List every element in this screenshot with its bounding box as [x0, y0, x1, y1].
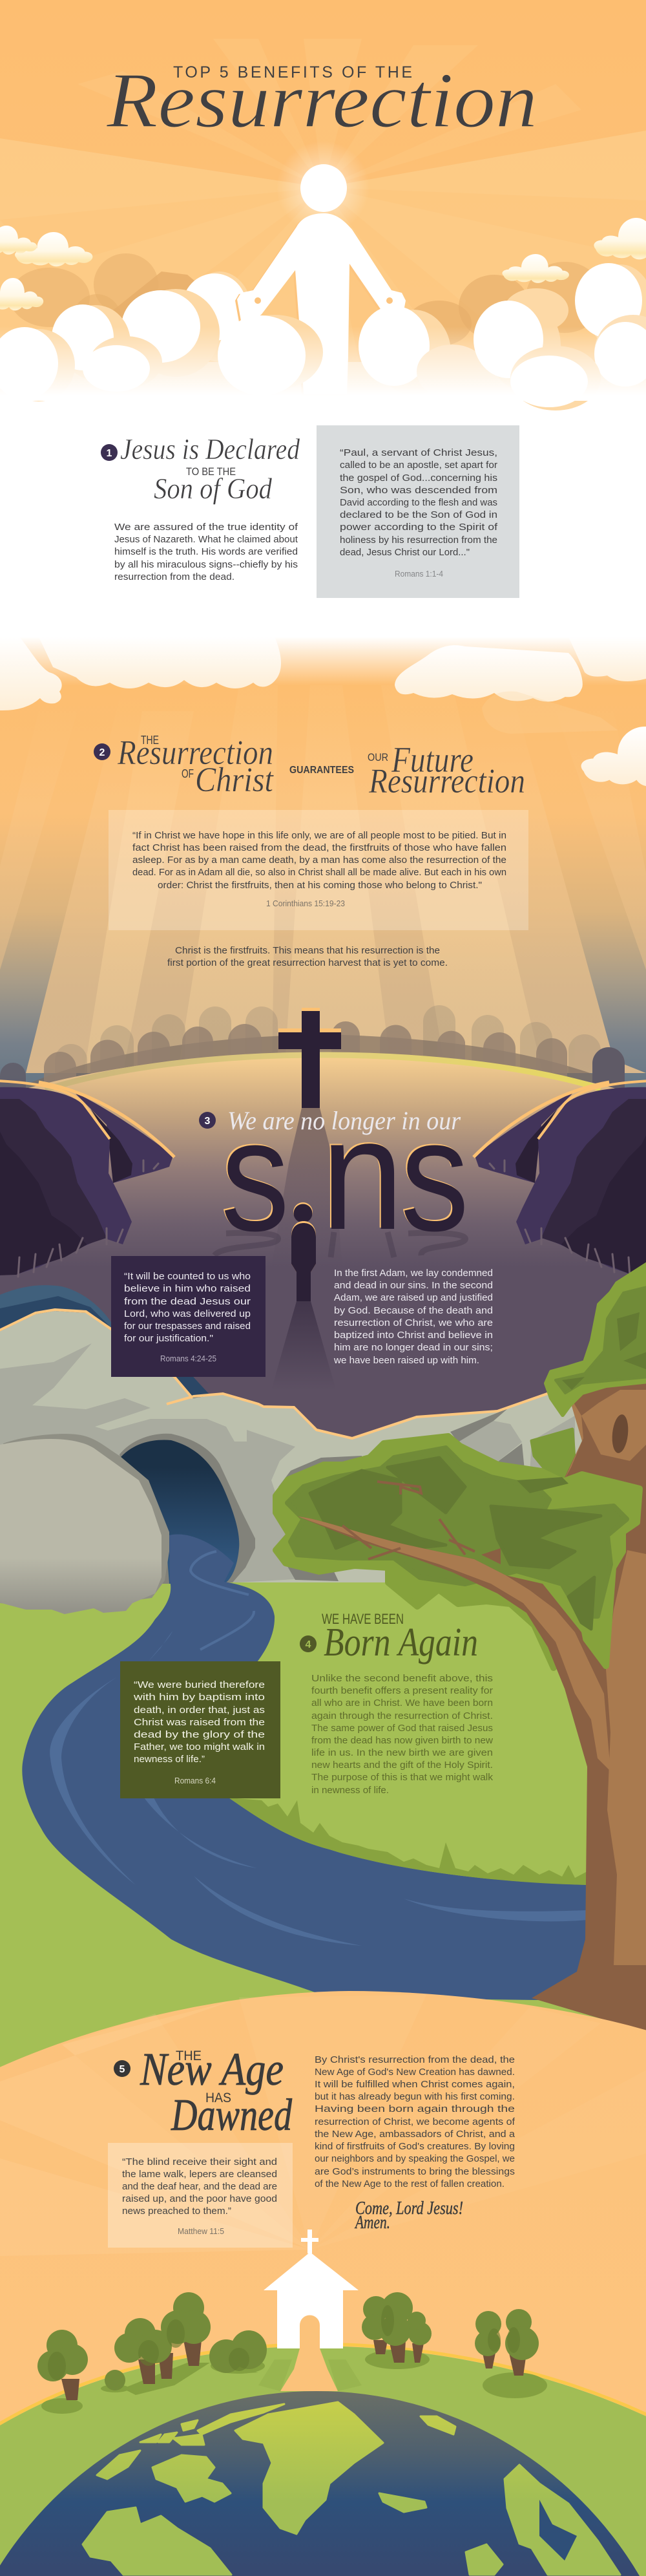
- trunk: [532, 1383, 646, 2033]
- tree shadows: [41, 2350, 547, 2414]
- section 2 scene: sky and light beams: [0, 637, 646, 1089]
- quote card: Romans 1:1-4: dead, Jesus Christ our Lord...": [340, 547, 470, 558]
- text block: The same power of God that raised Jesus: [311, 1723, 493, 1734]
- text block: resurrection from the dead.: [114, 571, 234, 582]
- badge 5: [114, 2060, 130, 2077]
- text block: life in us. In the new birth we are given: [311, 1747, 493, 1758]
- text block: Having been born again through the: [315, 2103, 515, 2114]
- quote card: Romans 1:1-4: declared to be the Son of God in: [340, 509, 497, 520]
- heading: The Resurrection of Christ guarantees our Future Resurrection: OF: [182, 767, 194, 780]
- text block: the New Age, ambassadors of Christ, and a: [315, 2129, 516, 2140]
- rock body: [0, 1311, 585, 1582]
- quote card: 1 Corinthians 15:19-23: order: Christ the firstfruits, then at his coming those who belong to Christ.": [158, 880, 482, 891]
- quote card: Romans 6:4: dead by the glory of the: [134, 1729, 265, 1740]
- heading: The Resurrection of Christ guarantees our Future Resurrection: Resurrection: [117, 733, 273, 772]
- heading: The Resurrection of Christ guarantees our Future Resurrection: [117, 733, 525, 800]
- big word: sins: s: [399, 1085, 468, 1262]
- quote card: Romans 1:1-4: “Paul, a servant of Christ Jesus,: [340, 447, 497, 458]
- quote card: Romans 6:4: Romans 6:4: [174, 1776, 216, 1785]
- trees: [37, 2292, 547, 2414]
- quote card: Romans 6:4: “We were buried therefore: [134, 1679, 265, 1690]
- benefit 3 text block: baptized into Christ and believe in: [334, 1330, 493, 1341]
- text block: [315, 2054, 516, 2189]
- benefit 3 text block: him are no longer dead in our sins;: [334, 1342, 493, 1353]
- quote card: Matthew 11:5: raised up, and the poor have good: [122, 2193, 277, 2204]
- quote card: Romans 1:1-4: Son, who was descended from: [340, 485, 497, 496]
- benefit 2 panel: [94, 733, 528, 968]
- benefit 3 panel: [199, 1084, 469, 1390]
- heading: The Resurrection of Christ guarantees our Future Resurrection: OUR: [368, 751, 388, 763]
- quote card: Romans 1:1-4: David according to the flesh and was: [340, 497, 497, 508]
- heading: The New Age has Dawned: New Age: [140, 2043, 284, 2095]
- closing prayer: Amen.: [354, 2213, 390, 2233]
- heading: The New Age has Dawned: THE: [176, 2049, 202, 2063]
- text block: himself is the truth. His words are verified: [114, 546, 298, 557]
- quote card: Matthew 11:5: news preached to them.”: [122, 2206, 231, 2217]
- text block: of the New Age to the rest of fallen creation.: [315, 2178, 505, 2189]
- benefit 3 quote card: Romans 4:24-25: for our justification.": [124, 1333, 213, 1344]
- big word: sins: [220, 1084, 469, 1264]
- heading: The New Age has Dawned: HAS: [205, 2091, 231, 2105]
- benefit 3 text block: Adam, we are raised up and justified: [334, 1292, 493, 1303]
- benefit 3 quote card: Romans 4:24-25: believe in him who raised: [124, 1283, 251, 1294]
- closing prayer: [354, 2198, 463, 2233]
- back clouds: [10, 253, 603, 352]
- quote card: 1 Corinthians 15:19-23: [109, 810, 528, 930]
- benefit 3 quote card: Romans 4:24-25: Romans 4:24-25: [160, 1354, 216, 1363]
- heading: We have been Born Again: [322, 1611, 478, 1665]
- quote card: Romans 1:1-4: holiness by his resurrection from the: [340, 535, 497, 546]
- benefit 3 text block: we have been raised up with him.: [333, 1355, 479, 1366]
- grass fringe: [229, 1798, 587, 1885]
- quote card: 1 Corinthians 15:19-23: 1 Corinthians 15:19-23: [266, 899, 345, 908]
- quote card: Matthew 11:5: the lame walk, lepers are cleansed: [122, 2169, 277, 2180]
- tree canopies: [37, 2292, 539, 2390]
- text block: but it has already begun with his first coming.: [315, 2091, 515, 2102]
- heading: The Resurrection of Christ guarantees our Future Resurrection: Christ: [195, 760, 275, 799]
- boulder: [0, 1434, 169, 1610]
- text block: in newness of life.: [311, 1785, 389, 1796]
- closing prayer: Come, Lord Jesus!: [355, 2198, 463, 2219]
- benefit 3 quote card: Romans 4:24-25: “It will be counted to us who: [124, 1271, 251, 1282]
- text block: By Christ's resurrection from the dead, the: [315, 2054, 515, 2065]
- text block: [311, 1673, 494, 1796]
- heading: The Resurrection of Christ guarantees our Future Resurrection: Resurrection: [368, 761, 525, 800]
- benefit 4 panel: [120, 1611, 494, 1798]
- badge 1: 1: [107, 448, 112, 459]
- quote card: Matthew 11:5: and the deaf hear, and the dead are: [122, 2181, 277, 2192]
- text block: firstfruits: Christ is the firstfruits. This means that his resurrection is the: [175, 945, 440, 956]
- quote card: Matthew 11:5: Matthew 11:5: [178, 2226, 224, 2236]
- badge 2: 2: [99, 747, 105, 758]
- text block: kind of firstfruits of God's creatures. By loving: [315, 2141, 515, 2152]
- text block: fourth benefit offers a present reality for: [311, 1685, 493, 1696]
- benefit 3 quote card: Romans 4:24-25: Lord, who was delivered up: [124, 1308, 251, 1319]
- text block: our neighbors and by speaking the Gospel, we: [315, 2153, 515, 2164]
- text block: resurrection of Christ, we become agents of: [315, 2116, 516, 2127]
- title: Resurrection: [106, 57, 537, 144]
- tree trunks: [61, 2340, 526, 2400]
- text block: The purpose of this is that we might walk: [311, 1772, 494, 1783]
- heading: The New Age has Dawned: Dawned: [171, 2091, 293, 2140]
- hill of Calvary: [0, 1052, 646, 1500]
- small back canopy: [532, 1429, 575, 1477]
- hanging clouds: [0, 637, 646, 786]
- quote card: 1 Corinthians 15:19-23: “If in Christ we have hope in this life only, we are of all people most to be pitied. But in: [132, 830, 506, 841]
- figure forming the letter i: [271, 1202, 336, 1390]
- heading: We have been Born Again: WE HAVE BEEN: [322, 1611, 404, 1627]
- text block: firstfruits: [167, 945, 448, 968]
- benefit 3 quote card: Romans 4:24-25: for our trespasses and raised: [124, 1321, 251, 1332]
- dawn dome background: [0, 1991, 646, 2576]
- quote card: Romans 6:4: Father, we too might walk in: [134, 1741, 265, 1752]
- big word: sins: s: [220, 1085, 288, 1262]
- graveyard tombstones: [0, 1005, 625, 1099]
- text block: Jesus of Nazareth. What he claimed about: [114, 534, 298, 545]
- heading: The New Age has Dawned: [140, 2043, 293, 2140]
- quote card: Romans 6:4: Christ was raised from the: [134, 1717, 265, 1728]
- quote card: Romans 1:1-4: the gospel of God...concerning his: [340, 473, 497, 484]
- heading: Jesus is Declared to be the Son of God: Jesus is Declared: [120, 432, 300, 465]
- text block: are God’s instruments to bring the blessings: [315, 2166, 515, 2177]
- big word: sins: n: [321, 1085, 404, 1262]
- badge 5: 5: [120, 2064, 125, 2075]
- sins reflection: [214, 1232, 465, 1257]
- cross and its shadow: [271, 1008, 342, 1267]
- text block: [114, 522, 298, 582]
- text block: from the dead has now given birth to new: [311, 1735, 493, 1746]
- left cliff: [0, 1081, 174, 1277]
- text block: We are assured of the true identity of: [114, 522, 298, 533]
- badge 3: 3: [205, 1116, 211, 1127]
- ground: [0, 1571, 646, 2075]
- badge 1: [101, 444, 118, 461]
- header scene: sky, rays and clouds: [0, 0, 646, 401]
- quote card: Matthew 11:5: “The blind receive their sight and: [122, 2156, 277, 2167]
- right cliff: [474, 1081, 646, 1277]
- quote card: Romans 6:4: death, in order that, just as: [134, 1705, 265, 1716]
- text block: It will be fulfilled when Christ comes again,: [315, 2079, 515, 2090]
- text block: by all his miraculous signs--chiefly by his: [114, 559, 298, 570]
- tomb rock scene: [0, 1285, 646, 2075]
- main canopy: [276, 1436, 640, 1668]
- title: TOP 5 BENEFITS OF THE: [173, 63, 412, 81]
- branch: [298, 1517, 591, 1688]
- heading: The Resurrection of Christ guarantees our Future Resurrection: THE: [141, 734, 159, 747]
- figure of risen Christ: [235, 164, 406, 396]
- heading: Jesus is Declared to be the Son of God: Son of God: [154, 472, 273, 505]
- great tree: [276, 1262, 646, 2033]
- quote card: Romans 1:1-4: called to be an apostle, set apart for: [340, 460, 497, 471]
- quote card: Romans 1:1-4: Romans 1:1-4: [395, 569, 443, 579]
- continents: [83, 2402, 620, 2575]
- quote card: Romans 6:4: newness of life.”: [134, 1754, 205, 1765]
- badge 4: [300, 1635, 317, 1652]
- quote card: Matthew 11:5: [108, 2143, 293, 2248]
- benefit 3 text block: [333, 1268, 493, 1366]
- quote card: 1 Corinthians 15:19-23: asleep. For as by a man came death, by a man has come also the resurrection of the: [132, 855, 506, 866]
- text block: new hearts and the gift of the Holy Spirit.: [311, 1760, 493, 1771]
- small floating clouds: [0, 218, 646, 310]
- foreground clouds behind figure: [0, 271, 646, 401]
- quote card: 1 Corinthians 15:19-23: dead. For as in Adam all die, so also in Christ shall all be made alive. But each in his own: [132, 867, 506, 878]
- benefit 3 text block: resurrection of Christ, we who are: [334, 1317, 493, 1328]
- benefit 3 quote card: Romans 4:24-25: from the dead Jesus our: [124, 1296, 251, 1307]
- globe: [0, 2391, 640, 2576]
- quote card: Romans 1:1-4: [317, 425, 519, 598]
- benefit 3 quote card: Romans 4:24-25: [111, 1256, 266, 1377]
- rock shadows: [0, 1343, 295, 1582]
- quote card: 1 Corinthians 15:19-23: fact Christ has been raised from the dead, the firstfruits of those who have fallen: [132, 842, 506, 853]
- church: [258, 2230, 362, 2391]
- benefit 3 text block: In the first Adam, we lay condemned: [334, 1268, 493, 1279]
- distant blue hill: [0, 1290, 210, 1403]
- big word: sins: s: [401, 1087, 469, 1264]
- river: [22, 1534, 591, 2001]
- quote card: Romans 6:4: [120, 1661, 280, 1798]
- knot hole: [610, 1414, 630, 1454]
- cave mouth: [120, 1434, 255, 1584]
- quote card: Romans 6:4: with him by baptism into: [133, 1692, 265, 1703]
- benefit 3 text block: and dead in our sins. In the second: [334, 1280, 493, 1291]
- benefit 1 panel: [101, 425, 519, 598]
- text block: firstfruits: first portion of the great resurrection harvest that is yet to come.: [167, 957, 448, 968]
- badge 3: [199, 1112, 216, 1129]
- badge 2: [94, 743, 110, 760]
- green earth horizon: [0, 2344, 646, 2576]
- benefit 3 text block: by God. Because of the death and: [334, 1305, 493, 1316]
- badge 4: 4: [306, 1639, 311, 1650]
- text block: all who are in Christ. We have been born: [311, 1698, 493, 1708]
- big word: sins: n: [320, 1084, 402, 1261]
- heading: We have been Born Again: Born Again: [324, 1621, 478, 1665]
- heading: Jesus is Declared to be the Son of God: [120, 432, 300, 505]
- clouds in front of figure: [0, 263, 646, 410]
- ridge highlight: [0, 1310, 549, 1438]
- text block: Unlike the second benefit above, this: [311, 1673, 493, 1684]
- benefit 5 panel: [108, 2043, 516, 2248]
- text block: New Age of God's New Creation has dawned.: [315, 2067, 515, 2078]
- heading: The Resurrection of Christ guarantees our Future Resurrection: Future: [391, 740, 474, 780]
- heading: The Resurrection of Christ guarantees our Future Resurrection: GUARANTEES: [289, 765, 354, 776]
- heading: Jesus is Declared to be the Son of God: TO BE THE: [186, 465, 236, 478]
- quote card: Romans 1:1-4: power according to the Spirit of: [340, 522, 498, 533]
- text block: again through the resurrection of Christ.: [311, 1710, 493, 1721]
- upper canopy: [546, 1262, 646, 1415]
- heading: We are no longer in our sins: We are no longer in our: [227, 1106, 461, 1135]
- big word: sins: s: [221, 1087, 289, 1264]
